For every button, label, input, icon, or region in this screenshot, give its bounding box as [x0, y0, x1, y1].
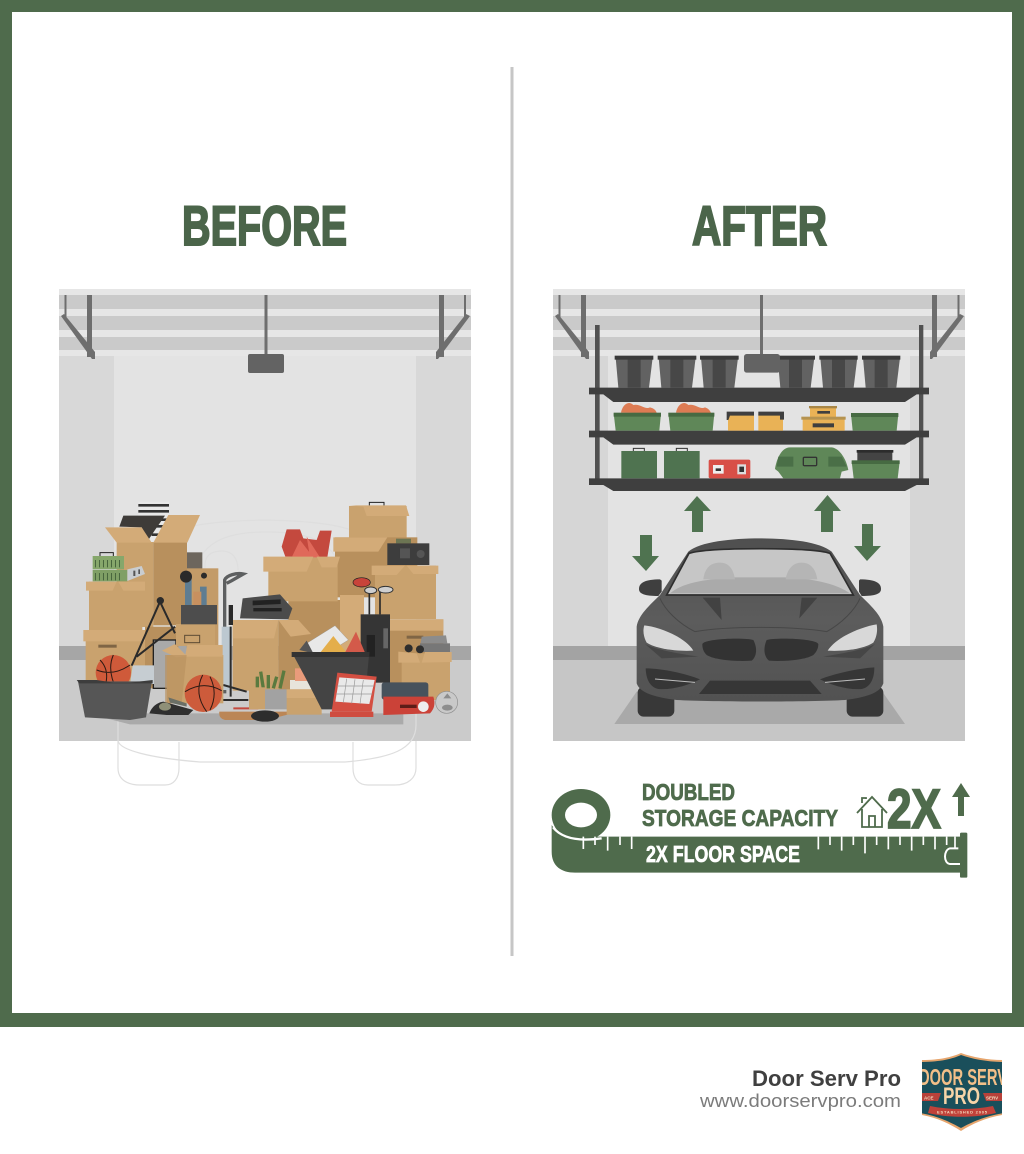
clutter pile: [77, 502, 458, 724]
middle row bins: [614, 403, 898, 431]
dark printer: [240, 594, 292, 619]
windshield: [667, 549, 853, 595]
logo text: established: ESTABLISHED 2005: [937, 1110, 988, 1114]
hood detail: [703, 598, 817, 620]
ceiling brackets and opener: [555, 295, 964, 359]
bin with basketball: [77, 655, 153, 720]
floor basketball: [185, 675, 222, 712]
logo text: right ribbon: SERV: [986, 1096, 998, 1100]
logo text: pro: PRO: [943, 1083, 980, 1110]
roof and body: [637, 538, 883, 701]
left stacked boxes: [83, 553, 147, 683]
plant box and small boxes: [249, 668, 322, 715]
floor shadow: [614, 692, 905, 724]
text: 2X: 2X: [887, 777, 941, 840]
text: doubled: DOUBLED: [642, 779, 735, 805]
tripod and panel: [130, 597, 178, 688]
logo text: ribbons: ACE: [924, 1096, 934, 1100]
ceiling brackets and opener: [61, 295, 470, 373]
black bin with papers: [292, 578, 393, 709]
sunglasses and tools: [149, 697, 290, 722]
back boxes left: [105, 502, 218, 648]
mirrors: [639, 579, 662, 596]
divider: [510, 67, 514, 956]
footer brand name: Door Serv Pro: [752, 1066, 901, 1091]
overhead shelving: [589, 325, 929, 491]
panel: after garage: [553, 289, 965, 741]
opener: [744, 354, 780, 373]
center-left boxes and organizer: [162, 571, 223, 703]
lower ribbon: [928, 1106, 996, 1117]
bottom row containers: [621, 447, 900, 478]
logo badge: [922, 1053, 1002, 1131]
top row bins: [615, 356, 900, 388]
tape graphic: [552, 789, 967, 878]
icon: up arrow: [952, 783, 970, 816]
lower vents: [646, 668, 700, 689]
shelf posts: [595, 325, 923, 485]
shelf decks: [589, 388, 929, 491]
side ribbons: [922, 1093, 1002, 1101]
panel: before garage: [59, 289, 471, 785]
arrows: [632, 495, 881, 571]
golf stand: [220, 574, 248, 700]
heading: before: BEFORE: [182, 194, 347, 257]
headlights: [643, 625, 693, 651]
tablet organizer: [330, 673, 377, 717]
middle back boxes: [263, 529, 364, 660]
text: storage capacity: STORAGE CAPACITY: [642, 805, 838, 831]
tape measure banner: [552, 777, 970, 878]
right back boxes: [333, 502, 452, 700]
car: [614, 538, 905, 724]
center open box: [233, 620, 311, 691]
floor shadow: [87, 713, 403, 724]
text: 2x floor space: 2X FLOOR SPACE: [646, 841, 800, 867]
wheels: [638, 687, 674, 717]
ghost car outline: [116, 520, 416, 785]
icon: house: [857, 797, 887, 827]
grille: [702, 639, 756, 661]
red tool case and ball: [382, 682, 458, 715]
footer website: www.doorservpro.com: [699, 1090, 901, 1111]
heading: after: AFTER: [692, 194, 827, 257]
